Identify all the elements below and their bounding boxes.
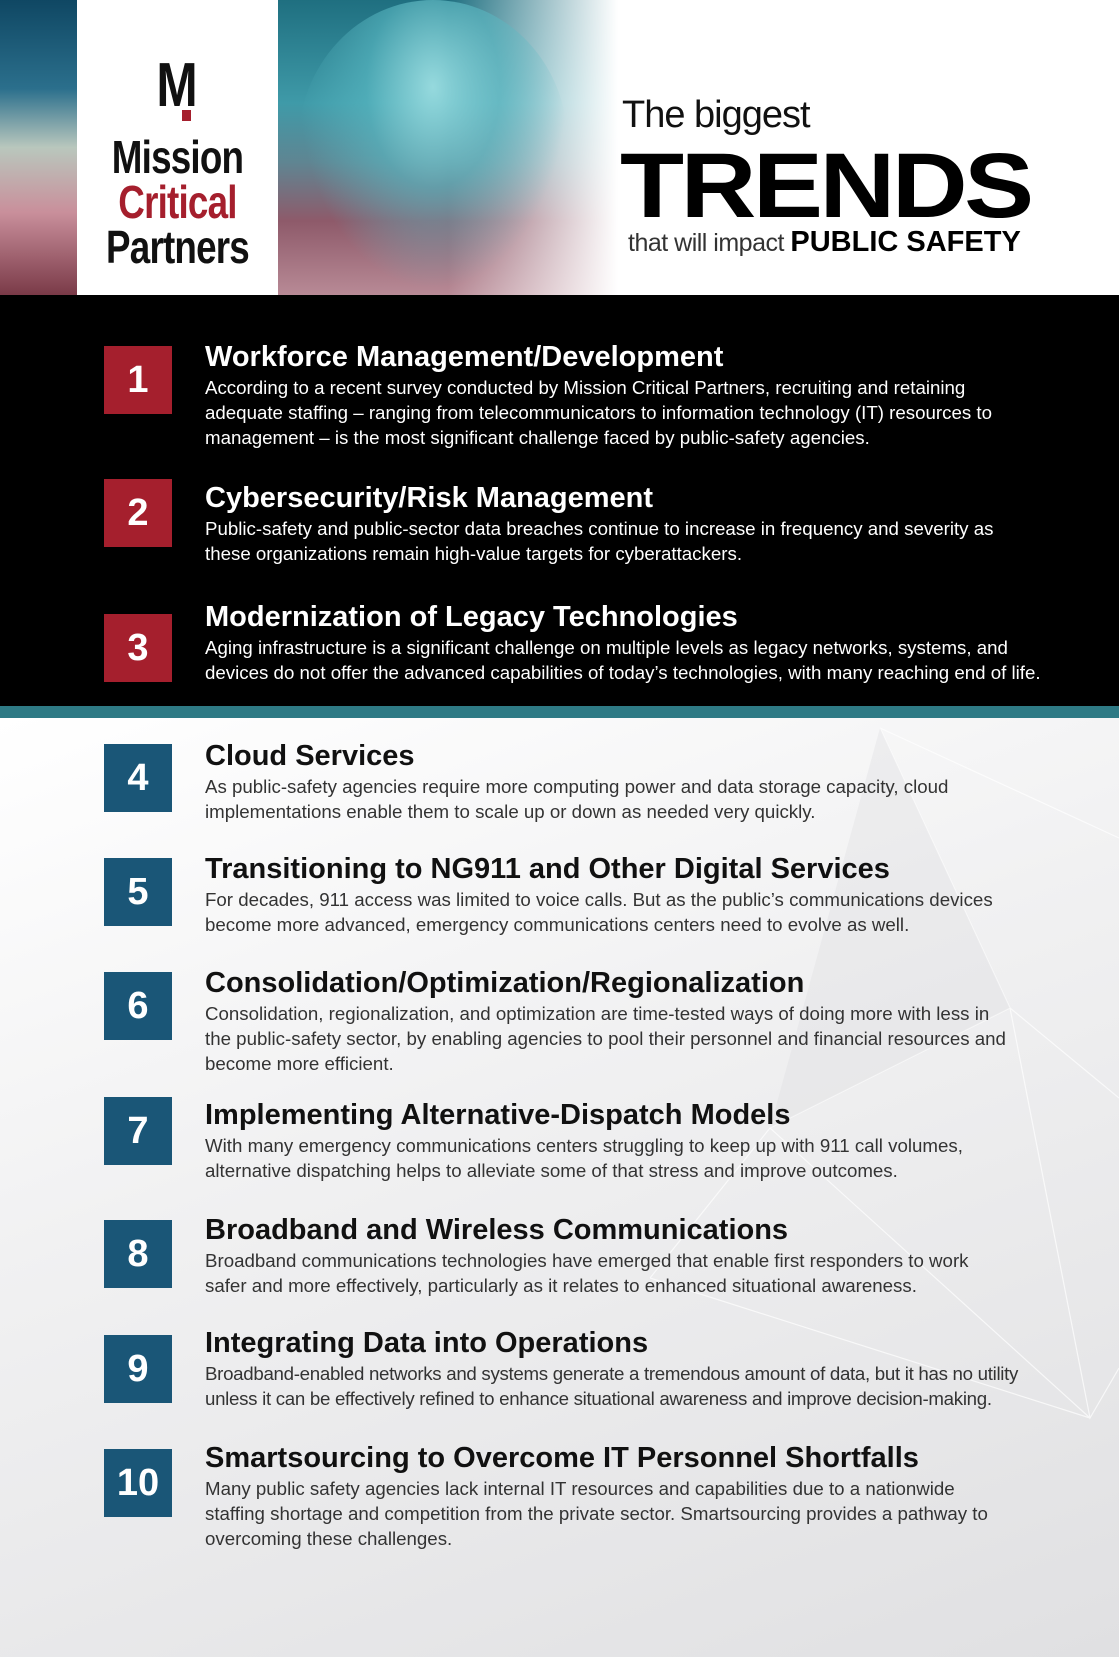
- item 8: Broadband communications technologies have emerged that enable first responders to work: [205, 1250, 969, 1271]
- image: brain head: [278, 0, 618, 295]
- item 3: Modernization of Legacy Technologies: [205, 601, 738, 633]
- title: [620, 94, 1031, 258]
- item 1: According to a recent survey conducted by Mission Critical Partners, recruiting and retaining: [205, 377, 965, 398]
- item 9: [104, 1327, 1018, 1409]
- item 2: Cybersecurity/Risk Management: [205, 482, 653, 514]
- item 8: safer and more effectively, particularly as it relates to enhanced situational awareness.: [205, 1275, 917, 1296]
- panel: top 3 trends: [0, 295, 1119, 706]
- item 10: 10: [117, 1462, 159, 1504]
- item 2: Public-safety and public-sector data breaches continue to increase in frequency and severity as: [205, 518, 993, 539]
- item 1: adequate staffing – ranging from telecommunicators to information technology (IT) resources to: [205, 402, 992, 423]
- item 6: [104, 967, 1006, 1074]
- item 9: Broadband-enabled networks and systems generate a tremendous amount of data, but it has no utility: [205, 1363, 1018, 1384]
- item 4: Cloud Services: [205, 740, 415, 772]
- item 6: Consolidation, regionalization, and optimization are time-tested ways of doing more with less in: [205, 1003, 989, 1024]
- item 8: [104, 1214, 969, 1296]
- image strip left: [0, 0, 77, 295]
- item 2: these organizations remain high-value targets for cyberattackers.: [205, 543, 742, 564]
- item 5: Transitioning to NG911 and Other Digital Services: [205, 853, 890, 885]
- logo text: Critical: [118, 176, 237, 228]
- item 3: 3: [127, 626, 149, 668]
- item 4: [104, 740, 948, 822]
- item 7: With many emergency communications centers struggling to keep up with 911 call volumes,: [205, 1135, 963, 1156]
- title: The biggest: [622, 94, 810, 136]
- item 6: Consolidation/Optimization/Regionalization: [205, 967, 804, 999]
- item 9: unless it can be effectively refined to enhance situational awareness and improve decision-making.: [205, 1388, 992, 1409]
- item 10: staffing shortage and competition from the private sector. Smartsourcing provides a pathway to: [205, 1503, 988, 1524]
- logo text: Mission: [112, 131, 243, 183]
- logo mark: M: [156, 51, 198, 120]
- item 3: devices do not offer the advanced capabilities of today’s technologies, with many reaching end of life.: [205, 662, 1041, 683]
- title: TRENDS: [620, 135, 1031, 237]
- item 5: become more advanced, emergency communications centers need to evolve as well.: [205, 914, 909, 935]
- item 9: Integrating Data into Operations: [205, 1327, 648, 1359]
- item 5: For decades, 911 access was limited to voice calls. But as the public’s communications devices: [205, 889, 993, 910]
- item 8: 8: [127, 1232, 149, 1274]
- item 9: 9: [127, 1348, 149, 1390]
- header: [0, 0, 1119, 295]
- panel: trends 4-10: [0, 718, 1119, 1657]
- item 5: [104, 853, 993, 935]
- item 6: the public-safety sector, by enabling agencies to pool their personnel and financial resources and: [205, 1028, 1006, 1049]
- item 10: overcoming these challenges.: [205, 1528, 452, 1549]
- item 1: management – is the most significant challenge faced by public-safety agencies.: [205, 427, 870, 448]
- item 7: Implementing Alternative-Dispatch Models: [205, 1099, 790, 1131]
- item 7: alternative dispatching helps to alleviate some of that stress and improve outcomes.: [205, 1160, 898, 1181]
- item 6: 6: [127, 984, 149, 1026]
- item 2: 2: [127, 492, 149, 534]
- logo text: Partners: [106, 221, 249, 273]
- item 7: [104, 1097, 963, 1181]
- item 10: Many public safety agencies lack internal IT resources and capabilities due to a nationwide: [205, 1478, 955, 1499]
- item 1: [104, 341, 992, 448]
- item 10: Smartsourcing to Overcome IT Personnel Shortfalls: [205, 1442, 919, 1474]
- item 2: [104, 479, 993, 564]
- item 4: 4: [127, 756, 149, 798]
- logo text: [106, 131, 249, 273]
- item 6: become more efficient.: [205, 1053, 394, 1074]
- item 10: [104, 1442, 988, 1549]
- item 1: Workforce Management/Development: [205, 341, 723, 373]
- title: that will impact PUBLIC SAFETY: [628, 226, 1021, 258]
- item 3: [104, 601, 1041, 683]
- item 8: Broadband and Wireless Communications: [205, 1214, 788, 1246]
- item 4: As public-safety agencies require more computing power and data storage capacity, cloud: [205, 776, 948, 797]
- item 1: 1: [127, 358, 149, 400]
- item 4: implementations enable them to scale up or down as needed very quickly.: [205, 801, 815, 822]
- item 3: Aging infrastructure is a significant challenge on multiple levels as legacy networks, systems, and: [205, 637, 1008, 658]
- item 5: 5: [127, 870, 149, 912]
- item 7: 7: [127, 1110, 149, 1152]
- logo: [77, 0, 278, 295]
